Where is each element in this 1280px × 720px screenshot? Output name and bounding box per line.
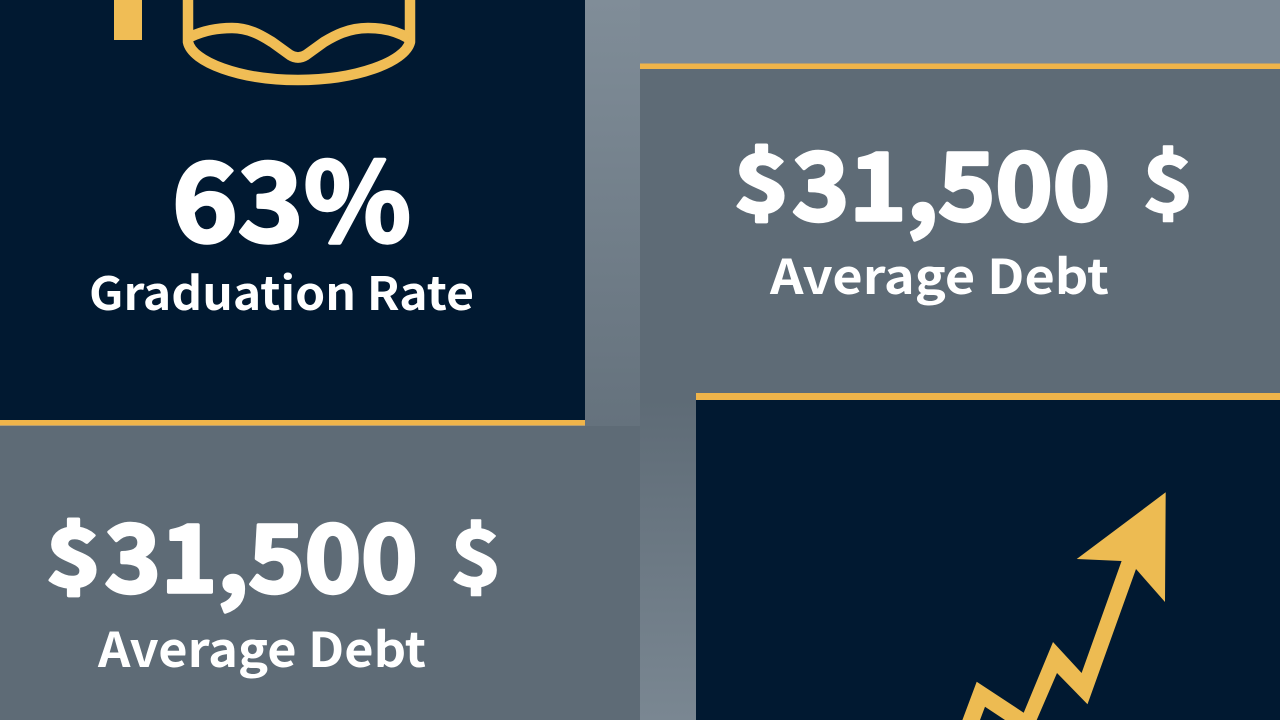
icon: rising zigzag arrow	[962, 492, 1166, 720]
stat: $31,500: $	[734, 120, 789, 235]
stat: 63%: 63%	[172, 116, 411, 274]
icon: dollar sign: $	[450, 497, 502, 609]
panel: average debt left	[0, 426, 640, 720]
panel: growth chart	[696, 393, 1280, 720]
stat: $31,500: 31,500	[104, 484, 418, 619]
icon: dollar sign: $	[1142, 123, 1194, 235]
panel: graduation rate	[0, 0, 585, 426]
label: Graduation Rate: Graduation Rate	[89, 258, 474, 324]
label: Average Debt: Average Debt	[97, 611, 426, 681]
stat: $31,500: $	[46, 494, 101, 609]
icon: graduation tassel and open book	[114, 0, 410, 80]
stat: $31,500: 31,500	[792, 112, 1110, 247]
panel: average debt right	[640, 64, 1280, 720]
label: Average Debt: Average Debt	[769, 238, 1109, 308]
